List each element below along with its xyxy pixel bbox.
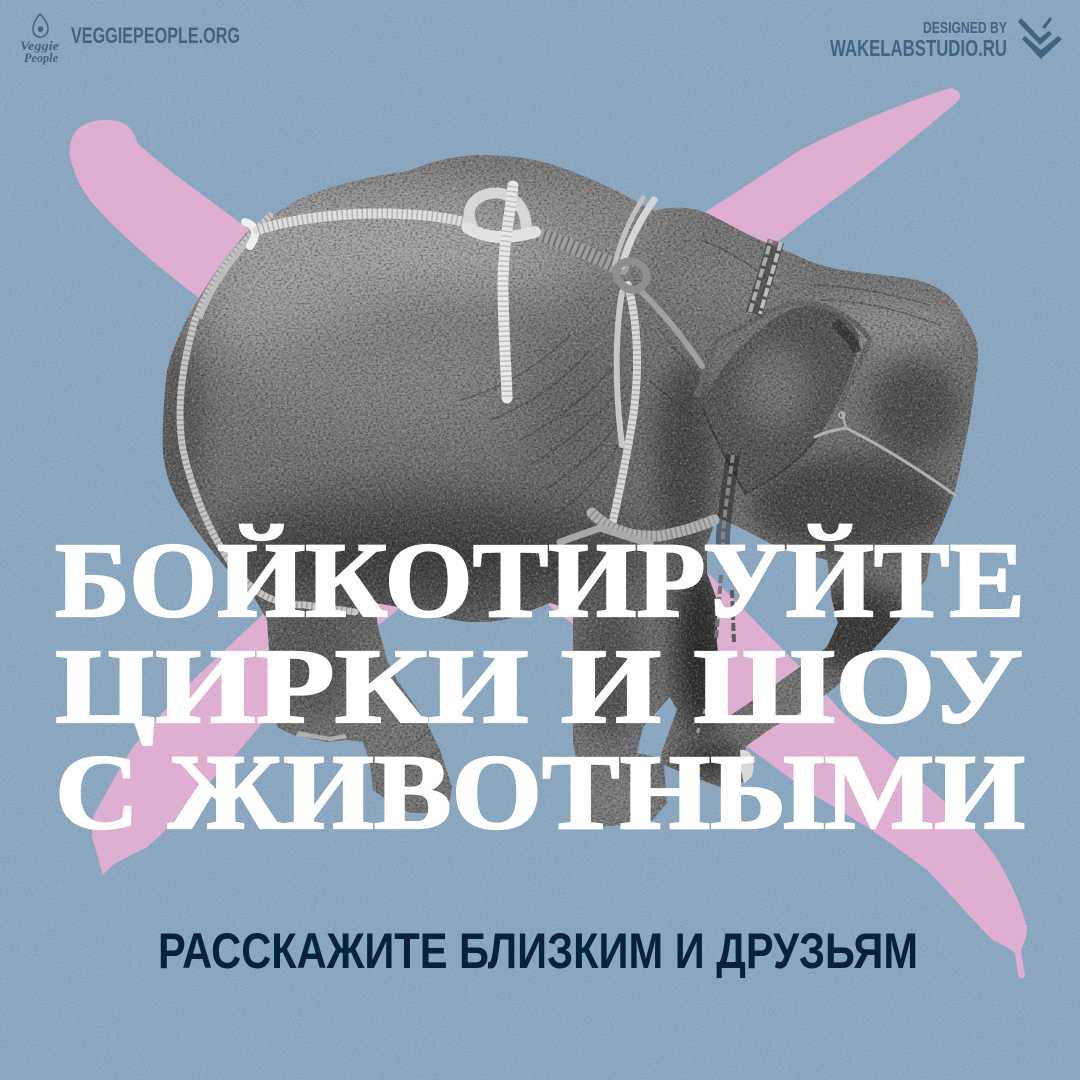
pink brush stroke: falling to the right [70, 120, 1027, 978]
logo: Veggie People [20, 14, 59, 65]
title: С ЖИВОТНЫМИ [55, 734, 1025, 852]
rope: along the back [258, 214, 702, 366]
logo: Veggie People: Veggie [20, 38, 59, 53]
rope: belly knot [560, 513, 714, 544]
title [55, 522, 1025, 852]
designer credit [830, 20, 1007, 61]
subtitle: РАССКАЖИТЕ БЛИЗКИМ И ДРУЗЬЯМ [158, 923, 918, 979]
rope: rump loop [180, 216, 355, 612]
icon: avocado [33, 14, 48, 37]
chain hanging from the chest [695, 455, 734, 738]
body shading [155, 185, 965, 822]
logo: Veggie People: People [24, 50, 58, 65]
skin texture [150, 140, 990, 840]
skin wrinkles [395, 240, 940, 770]
icon: chevrons [1018, 17, 1062, 59]
pink brush stroke: rising to the right [92, 88, 960, 875]
ropes [180, 186, 955, 612]
chain at the neck [750, 240, 781, 314]
title: БОЙКОТИРУЙТЕ [55, 522, 1025, 640]
title: ЦИРКИ И ШОУ [55, 628, 1023, 746]
rope: knot and dangling end [468, 186, 535, 398]
ear [696, 303, 870, 494]
designer credit: DESIGNED BY [923, 20, 1007, 37]
elephant photo [150, 140, 990, 840]
rope: head harness [815, 412, 955, 495]
designer credit: WAKELABSTUDIO.RU [830, 35, 1007, 61]
rope: shoulder strands [612, 198, 654, 525]
toenails [296, 731, 754, 784]
website label: VEGGIEPEOPLE.ORG [71, 23, 240, 48]
